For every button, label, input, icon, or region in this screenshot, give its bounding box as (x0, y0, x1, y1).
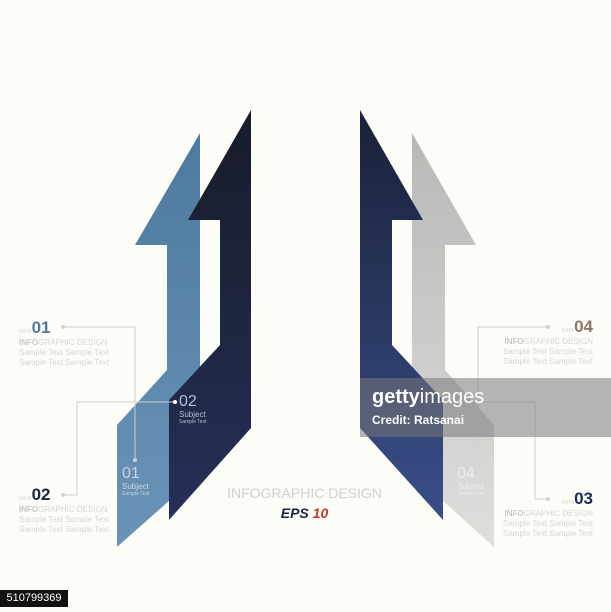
data 04: Sample Text Sample Text (503, 357, 593, 366)
data 03: DATA (561, 500, 574, 506)
center title: INFOGRAPHIC DESIGN (227, 485, 382, 501)
right dark arrow (360, 110, 443, 520)
data 04: DATA (561, 328, 574, 334)
data 04: Sample Text Sample Text (503, 347, 593, 356)
id tag: 510799369 (6, 592, 62, 604)
data 03: INFOGRAPHIC DESIGN (505, 509, 593, 518)
eps label: EPS 10 (281, 505, 328, 521)
watermark band (360, 378, 611, 437)
data 01 (19, 318, 109, 367)
data 02: Sample Text Sample Text (19, 515, 109, 524)
text: Subject (179, 410, 206, 419)
arrow labels: Subject (122, 482, 149, 491)
data 01: Sample Text Sample Text (19, 358, 109, 367)
connector lines (63, 327, 548, 499)
arrow labels: Sample Text (122, 491, 149, 497)
data 02 (19, 485, 109, 534)
arrow labels: 01 (122, 465, 140, 482)
id tag (0, 590, 68, 607)
text: 02 (179, 393, 197, 410)
text: Sample Text (457, 491, 484, 497)
data 01: Sample Text Sample Text (19, 348, 109, 357)
data 04: INFOGRAPHIC DESIGN (505, 337, 593, 346)
text: Subject (457, 482, 484, 491)
data 03 (503, 489, 593, 538)
data 02: Sample Text Sample Text (19, 525, 109, 534)
data 03: Sample Text Sample Text (503, 529, 593, 538)
data 02: 02 (32, 485, 51, 504)
arrow labels (122, 465, 150, 497)
watermark band: gettyimages (372, 386, 484, 408)
data 04: 04 (574, 317, 593, 336)
data 02: INFOGRAPHIC DESIGN (19, 505, 107, 514)
data 02: DATA (19, 496, 32, 502)
data 04 (503, 317, 593, 366)
left light blue arrow (117, 133, 200, 547)
right gray arrow (412, 133, 494, 547)
data 03: 03 (574, 489, 593, 508)
left dark arrow (169, 110, 251, 520)
data 01: DATA (19, 329, 32, 335)
data 01: 01 (32, 318, 51, 337)
text: 04 (457, 465, 475, 482)
data 01: INFOGRAPHIC DESIGN (19, 338, 107, 347)
watermark band: Credit: Ratsanai (372, 413, 464, 427)
text: Sample Text (179, 419, 206, 425)
data 03: Sample Text Sample Text (503, 519, 593, 528)
